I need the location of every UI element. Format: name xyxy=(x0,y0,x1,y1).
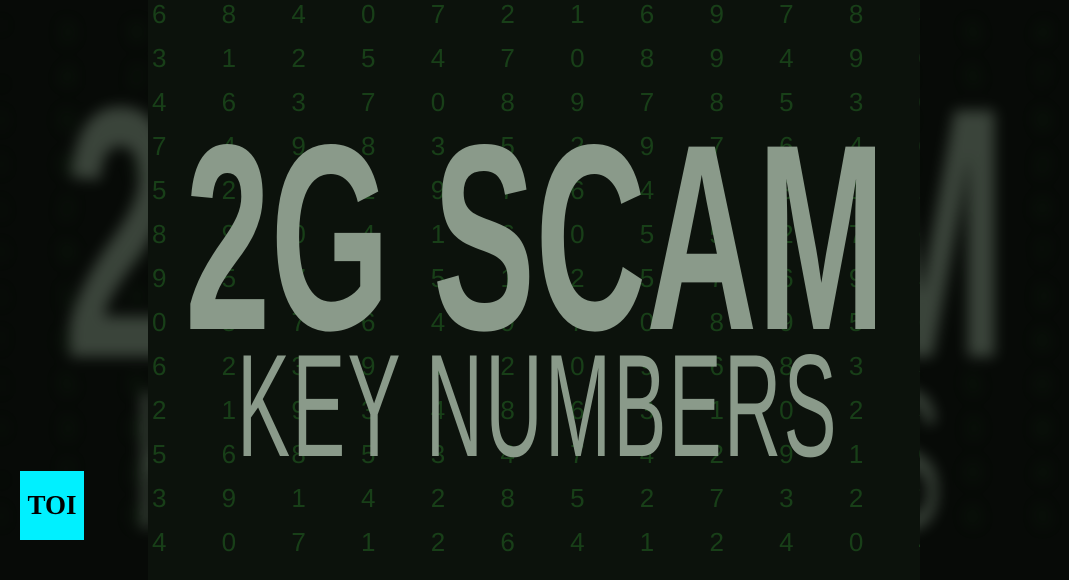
blurred background copy: 2G SCAM xyxy=(63,34,1008,434)
title: 2G SCAM: 2G SCAM xyxy=(185,90,885,386)
subtitle: KEY NUMBERS: KEY NUMBERS xyxy=(237,324,839,487)
central panel xyxy=(148,0,920,580)
logo: TOI xyxy=(20,471,84,540)
blurred background copy: KEY NUMBERS xyxy=(133,350,945,570)
logo: TOI: TOI xyxy=(27,490,77,520)
